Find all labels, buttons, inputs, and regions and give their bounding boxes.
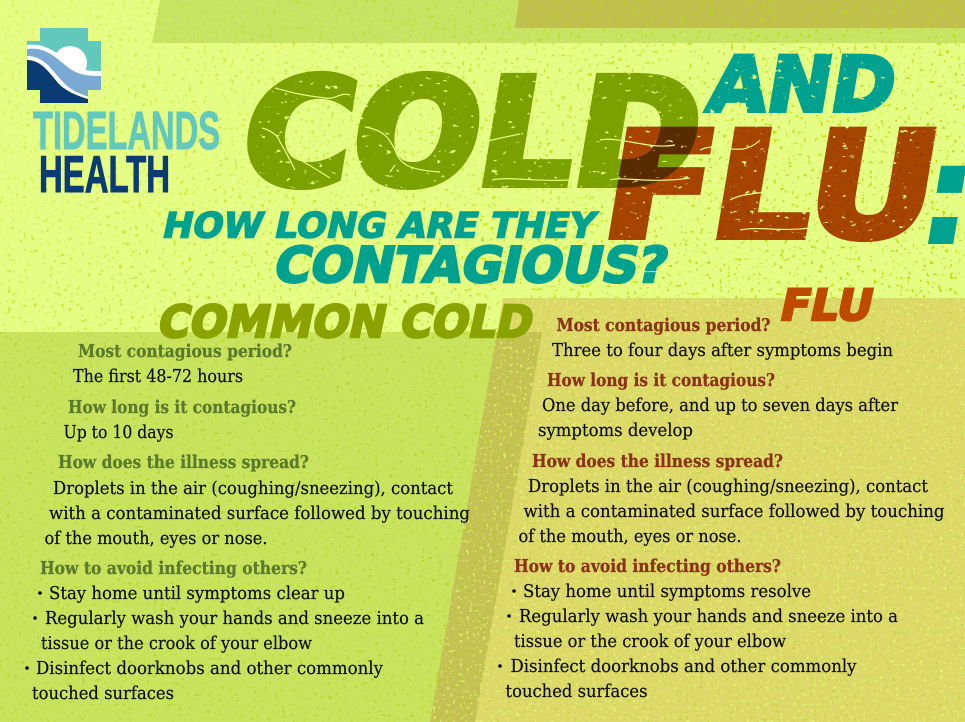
logo word: Health: HEALTH [39,146,170,204]
question: most contagious period (cold): Most contagious period? [78,341,292,362]
question: how long contagious (flu): How long is it contagious? [547,370,775,391]
answer: up to 10 days: Up to 10 days [64,422,174,443]
bullet list (flu): Stay home until symptoms resolve [523,581,811,602]
answer: spread description (cold): with a contaminated surface followed by touching [49,503,470,524]
panel: common cold background [0,332,542,722]
answer: one day before: symptoms develop [538,420,693,441]
question: how long contagious (cold): How long is it contagious? [68,397,296,418]
bullet list (flu): tissue or the crook of your elbow [514,631,787,652]
title: COLD: COLD [230,48,715,219]
panel: common cold text [25,341,470,704]
question: how illness spreads (cold): How does the illness spread? [58,452,309,473]
answer: first 48-72 hours: The first 48-72 hours [73,366,243,387]
panel: flu text [498,315,944,702]
bullet list (cold): Regularly wash your hands and sneeze into a [45,608,424,629]
logo: Tidelands Health [27,28,220,204]
bullet list (flu): Disinfect doorknobs and other commonly [510,656,857,677]
panel: flu background [430,298,965,722]
heading: flu: FLU [776,281,878,331]
bullet list (flu): touched surfaces [506,681,648,702]
top-right dark band [515,0,965,28]
decorative cracks [262,88,810,230]
subtitle: how long are they: HOW LONG ARE THEY [159,206,600,246]
question: how to avoid infecting others (cold): How to avoid infecting others? [40,558,307,579]
bullet list (flu) [498,581,898,702]
bullet list (cold): Disinfect doorknobs and other commonly [36,658,384,679]
heading: common cold: COMMON COLD [154,297,538,348]
question: how illness spreads (flu): How does the illness spread? [532,451,783,472]
bullet list (cold): touched surfaces [32,683,174,704]
icon: cross with sun and waves [27,28,101,103]
title: AND: AND [702,41,903,130]
bullet list (cold) [25,583,424,704]
question: how to avoid infecting others (flu): How to avoid infecting others? [514,556,781,577]
answer: spread description (cold): Droplets in the air (coughing/sneezing), contact [53,478,454,499]
logo word: Tidelands: TIDELANDS [33,101,220,161]
answer: spread description (cold): of the mouth, eyes or nose. [44,528,268,549]
answer: spread description (flu) [518,476,944,547]
panel overlap band [430,332,542,722]
answer: spread description (flu): Droplets in the air (coughing/sneezing), contact [528,476,929,497]
answer: one day before: One day before, and up to seven days after [542,395,898,416]
answer: one day before [538,395,898,441]
bullet list (flu): Regularly wash your hands and sneeze into a [519,606,898,627]
subtitle: contagious: CONTAGIOUS? [269,237,674,294]
bullet list (cold): tissue or the crook of your elbow [41,633,313,654]
answer: spread description (flu): of the mouth, eyes or nose. [518,526,742,547]
answer: spread description (cold) [44,478,470,549]
top-left light band [152,0,965,43]
question: most contagious period (flu): Most contagious period? [556,315,770,336]
answer: three to four days: Three to four days after symptoms begin [552,340,893,361]
bullet list (cold): Stay home until symptoms clear up [49,583,345,604]
title: FLU: FLU [592,101,952,271]
